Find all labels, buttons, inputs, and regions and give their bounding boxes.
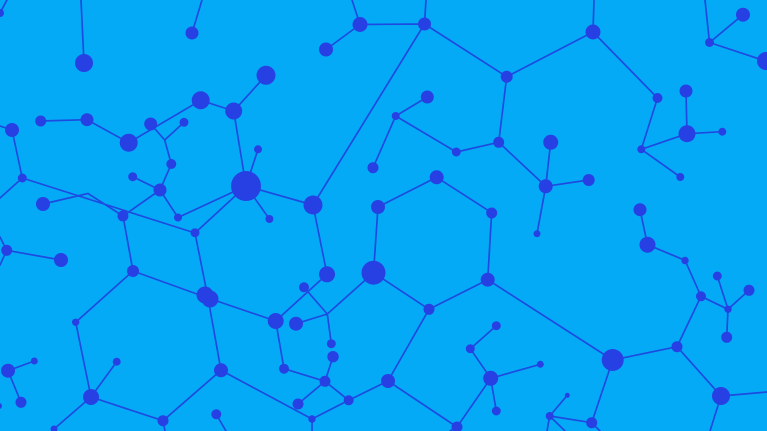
- cluster: top-right fragment: [705, 0, 767, 70]
- cluster: bottom-left fragment: [0, 358, 38, 409]
- cluster: bottom stub node: [211, 409, 226, 431]
- cluster: left-edge fragment: [0, 237, 68, 267]
- cluster: top-left stub nodes: [0, 0, 202, 72]
